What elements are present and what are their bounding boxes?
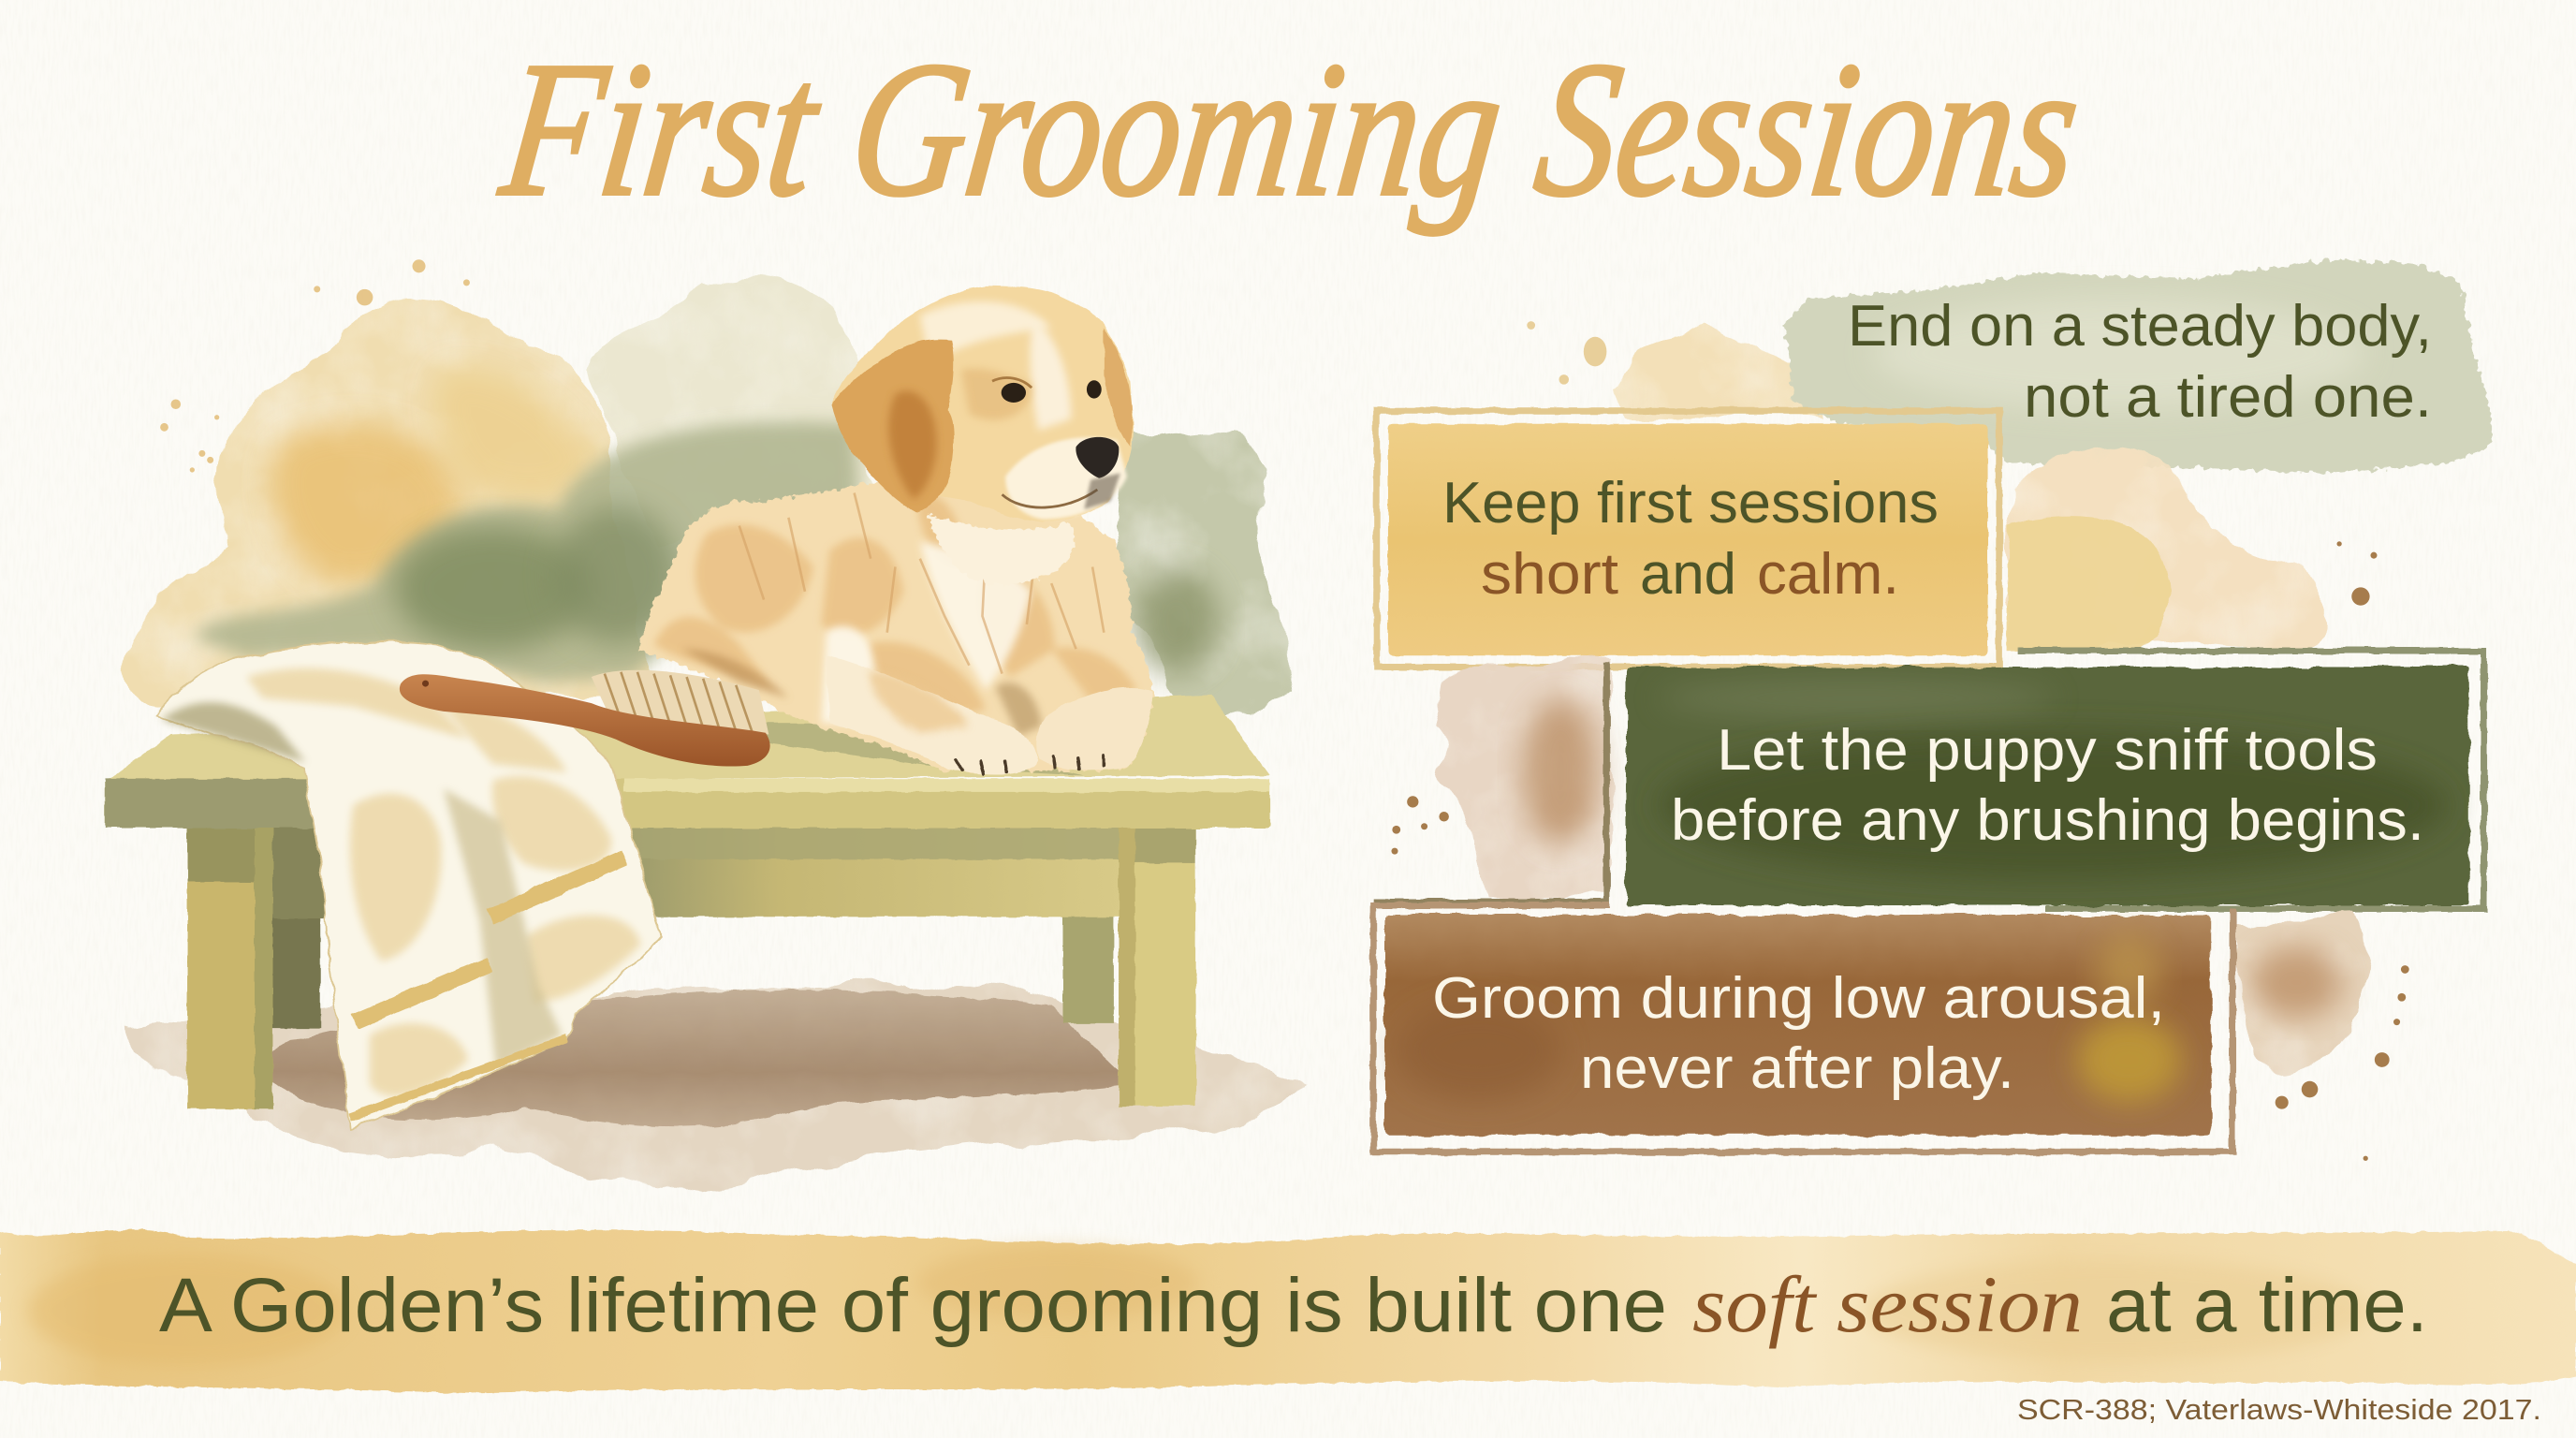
puppy fur shading [653, 492, 1136, 720]
tip 4 right brown wash [2237, 917, 2370, 1078]
towel mottled patches [246, 668, 640, 1096]
towel stripes [350, 858, 624, 1117]
title: First Grooming Sessions [491, 22, 2090, 236]
tip 3 left frame line [1373, 662, 1606, 902]
source credit: SCR-388; Vaterlaws-Whiteside 2017. [2017, 1393, 2541, 1426]
puppy nose [1076, 437, 1119, 478]
puppy muzzle [1005, 437, 1127, 520]
tip 3 text [1671, 718, 2424, 853]
bench back leg, left [271, 917, 320, 1029]
tip 2 frame [1377, 411, 1999, 668]
background watercolor wash [124, 277, 1293, 712]
tip 4 frame [1373, 905, 2232, 1152]
closing message: A Golden’s lifetime of grooming is built one [159, 1263, 1667, 1348]
puppy eyes [992, 378, 1102, 403]
tip panels [1373, 259, 2491, 1161]
closing message [159, 1259, 2428, 1349]
tip 2 text: Keep first sessions [1442, 471, 1939, 536]
puppy left ear [831, 340, 954, 513]
tip 2 box: yellow [1388, 424, 1988, 655]
puppy fur strokes [739, 492, 1104, 674]
bench right front leg [1119, 827, 1196, 1106]
brush bristles [592, 670, 768, 734]
tip 1 text: End on a steady body, [1848, 294, 2432, 359]
puppy [637, 286, 1153, 775]
tip 1 text [1848, 294, 2432, 430]
tip 3 frame [2017, 651, 2484, 909]
grooming brush [400, 670, 770, 766]
puppy under-chest shadow [996, 682, 1042, 736]
tip 2 text [1442, 471, 1939, 607]
puppy neck ruff [929, 513, 1076, 585]
puppy right ear [1104, 329, 1133, 447]
tip 2 text: and [1640, 542, 1736, 607]
tip 3 box: dark green [1626, 668, 2469, 905]
tip 1 text: not a tired one. [2024, 365, 2432, 430]
puppy head [831, 286, 1134, 522]
tip 4 text: never after play. [1580, 1036, 2014, 1101]
tip 4 text [1432, 966, 2165, 1101]
towel [156, 641, 661, 1129]
peach wash behind top tip [1606, 325, 1823, 419]
paint splatter, left [160, 259, 470, 473]
bench front edge [105, 779, 1270, 829]
bench apron [629, 827, 1125, 917]
bench [105, 695, 1270, 1109]
bench top surface [105, 695, 1270, 782]
tip 3 left brown wash [1438, 660, 1606, 897]
tip 3 text: Let the puppy sniff tools [1717, 718, 2378, 783]
puppy mouth [1003, 473, 1120, 509]
tip 1 background: olive wash [1784, 259, 2491, 473]
puppy chest light patch [920, 542, 1032, 690]
bench left front leg [187, 827, 272, 1109]
tip 4 box: brown [1384, 916, 2211, 1136]
puppy front paws [827, 655, 1153, 775]
paint splatter, right [1391, 541, 2409, 1161]
brush handle [400, 674, 770, 766]
tip 4 text: Groom during low arousal, [1432, 966, 2165, 1031]
tip 3 text: before any brushing begins. [1671, 788, 2424, 853]
floor shadow [128, 985, 1301, 1190]
puppy body [637, 483, 1153, 772]
tip 2 text: short [1481, 542, 1618, 607]
closing message: at a time. [2106, 1263, 2428, 1348]
bench back leg, right [1062, 912, 1114, 1023]
illustration: puppy on bench [105, 259, 1301, 1190]
bottom band [0, 1230, 2576, 1393]
tip 2 text: calm. [1757, 542, 1899, 607]
peach wash right of tip 2 [2008, 447, 2336, 653]
closing message: soft session [1692, 1259, 2083, 1349]
